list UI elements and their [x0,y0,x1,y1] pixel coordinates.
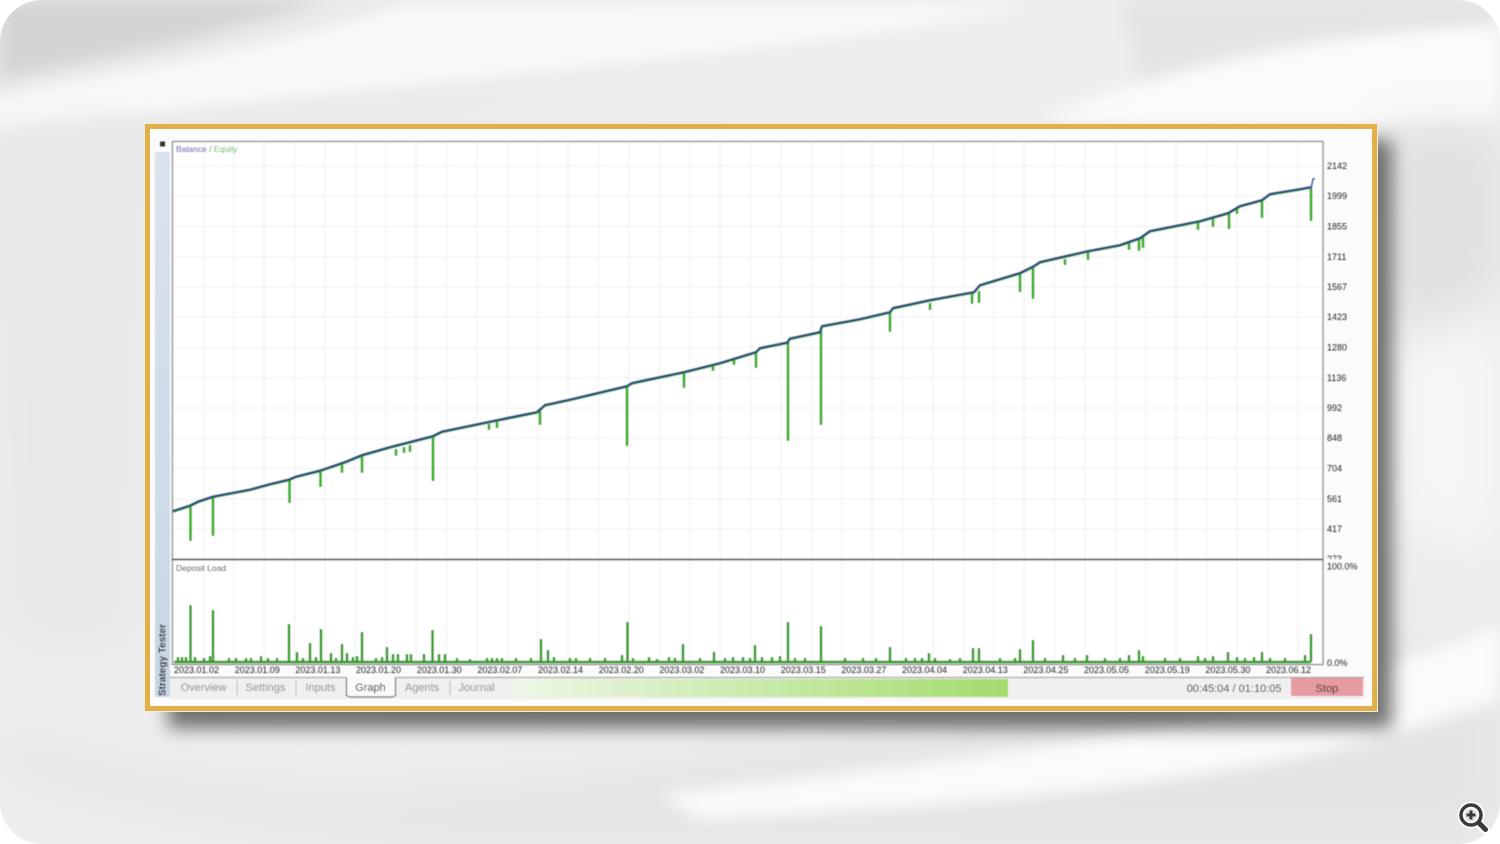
drop shadow behind chart window [168,140,1392,728]
legend: balance and equity: Balance / Equity [176,144,238,154]
left sidebar with vertical title: Strategy Tester [158,624,168,696]
y axis labels: 992 [1327,403,1342,413]
equity line under balance [173,188,1311,512]
x axis date labels: 2023.05.19 [1145,665,1190,675]
y axis labels: 1136 [1327,373,1346,383]
progress bar [512,679,1008,697]
elapsed time: 00:45:04 / 01:10:05 [1187,683,1282,695]
x axis date labels: 2023.03.02 [659,665,704,675]
plot area background and grid [172,141,1323,665]
x axis date labels: 2023.01.02 [174,665,219,675]
tab bar: Graph [355,682,386,694]
stop button: Stop [1316,683,1338,695]
x axis date labels: 2023.04.25 [1023,665,1068,675]
icon: zoom magnifier [1458,802,1490,834]
strategy tester chart [154,140,1364,699]
y axis labels: 1567 [1327,282,1347,292]
y axis labels: 1280 [1327,342,1347,352]
x axis date labels: 2023.02.14 [538,665,583,675]
x axis date labels: 2023.04.04 [902,665,947,675]
y axis labels: 704 [1327,464,1342,474]
y axis labels: 417 [1327,524,1342,534]
tab bar: Settings [246,682,286,694]
chart window with gold frame [145,124,1377,711]
tab bar: Overview [181,682,226,694]
x axis date labels: 2023.02.20 [599,665,644,675]
y axis labels: 0.0% [1327,658,1348,668]
y axis labels: 561 [1327,494,1342,504]
deposit load chart [174,563,1311,662]
deposit load chart: Deposit Load [176,563,226,573]
x axis date labels: 2023.01.13 [295,665,340,675]
x axis date labels: 2023.03.10 [720,665,765,675]
y axis labels: 1999 [1327,191,1347,201]
equity drawdown spikes [190,188,1311,541]
y axis labels: 1711 [1327,252,1346,262]
stop button [1291,678,1363,696]
tab bar: Agents [405,682,440,694]
x axis date labels: 2023.04.13 [963,665,1008,675]
x axis date labels: 2023.03.15 [781,665,826,675]
left sidebar with vertical title [155,142,170,697]
y axis labels: 273 [1327,554,1342,564]
x axis date labels: 2023.01.20 [356,665,401,675]
tab bar: Journal [458,682,495,694]
y axis labels: 100.0% [1327,562,1358,572]
y axis labels: 1423 [1327,312,1347,322]
x axis date labels: 2023.02.07 [477,665,522,675]
tab bar: Inputs [306,682,336,694]
x axis date labels: 2023.06.12 [1266,665,1311,675]
y axis labels [1327,161,1358,668]
tab bar [170,678,1365,699]
y axis labels: 2142 [1327,161,1347,171]
x axis date labels: 2023.05.05 [1084,665,1129,675]
balance line [173,187,1311,511]
x axis date labels: 2023.01.30 [417,665,462,675]
x axis date labels: 2023.03.27 [841,665,886,675]
y axis labels: 1855 [1327,222,1347,232]
y axis labels: 848 [1327,433,1342,443]
x axis date labels [174,665,1311,675]
x axis date labels: 2023.05.30 [1205,665,1250,675]
x axis date labels: 2023.01.09 [235,665,280,675]
